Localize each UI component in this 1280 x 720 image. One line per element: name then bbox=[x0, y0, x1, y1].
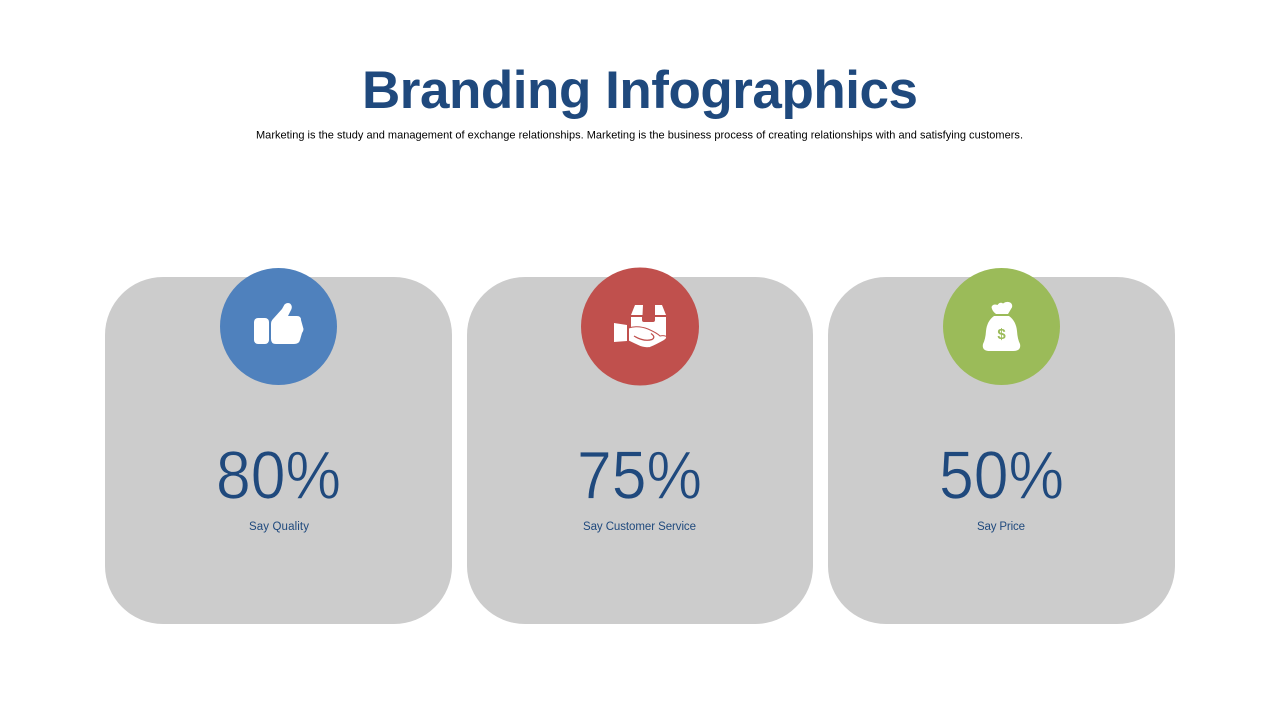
label: say price: Say Price bbox=[977, 521, 1025, 533]
stat: 80%: 80% bbox=[216, 438, 341, 514]
subtitle: Marketing is the study and management of exchange relationships. Marketing is the business process of creating relationships with and satisfying customers. bbox=[256, 130, 1023, 142]
icon: hand holding box bbox=[581, 268, 699, 386]
card background bbox=[828, 277, 1175, 624]
card background bbox=[105, 277, 452, 624]
title: Branding Infographics bbox=[362, 61, 918, 120]
icon: money bag bbox=[943, 268, 1060, 385]
panel: quality bbox=[105, 268, 452, 624]
stat: 50%: 50% bbox=[939, 438, 1064, 514]
stat: 75%: 75% bbox=[577, 438, 702, 514]
panel: price bbox=[828, 268, 1175, 624]
panel: customer service bbox=[467, 268, 813, 624]
icon: thumbs up bbox=[220, 268, 337, 385]
label: say quality: Say Quality bbox=[249, 521, 309, 533]
icon: money bag: $ bbox=[997, 326, 1006, 343]
card background bbox=[467, 277, 813, 624]
label: say customer service: Say Customer Service bbox=[583, 521, 696, 533]
